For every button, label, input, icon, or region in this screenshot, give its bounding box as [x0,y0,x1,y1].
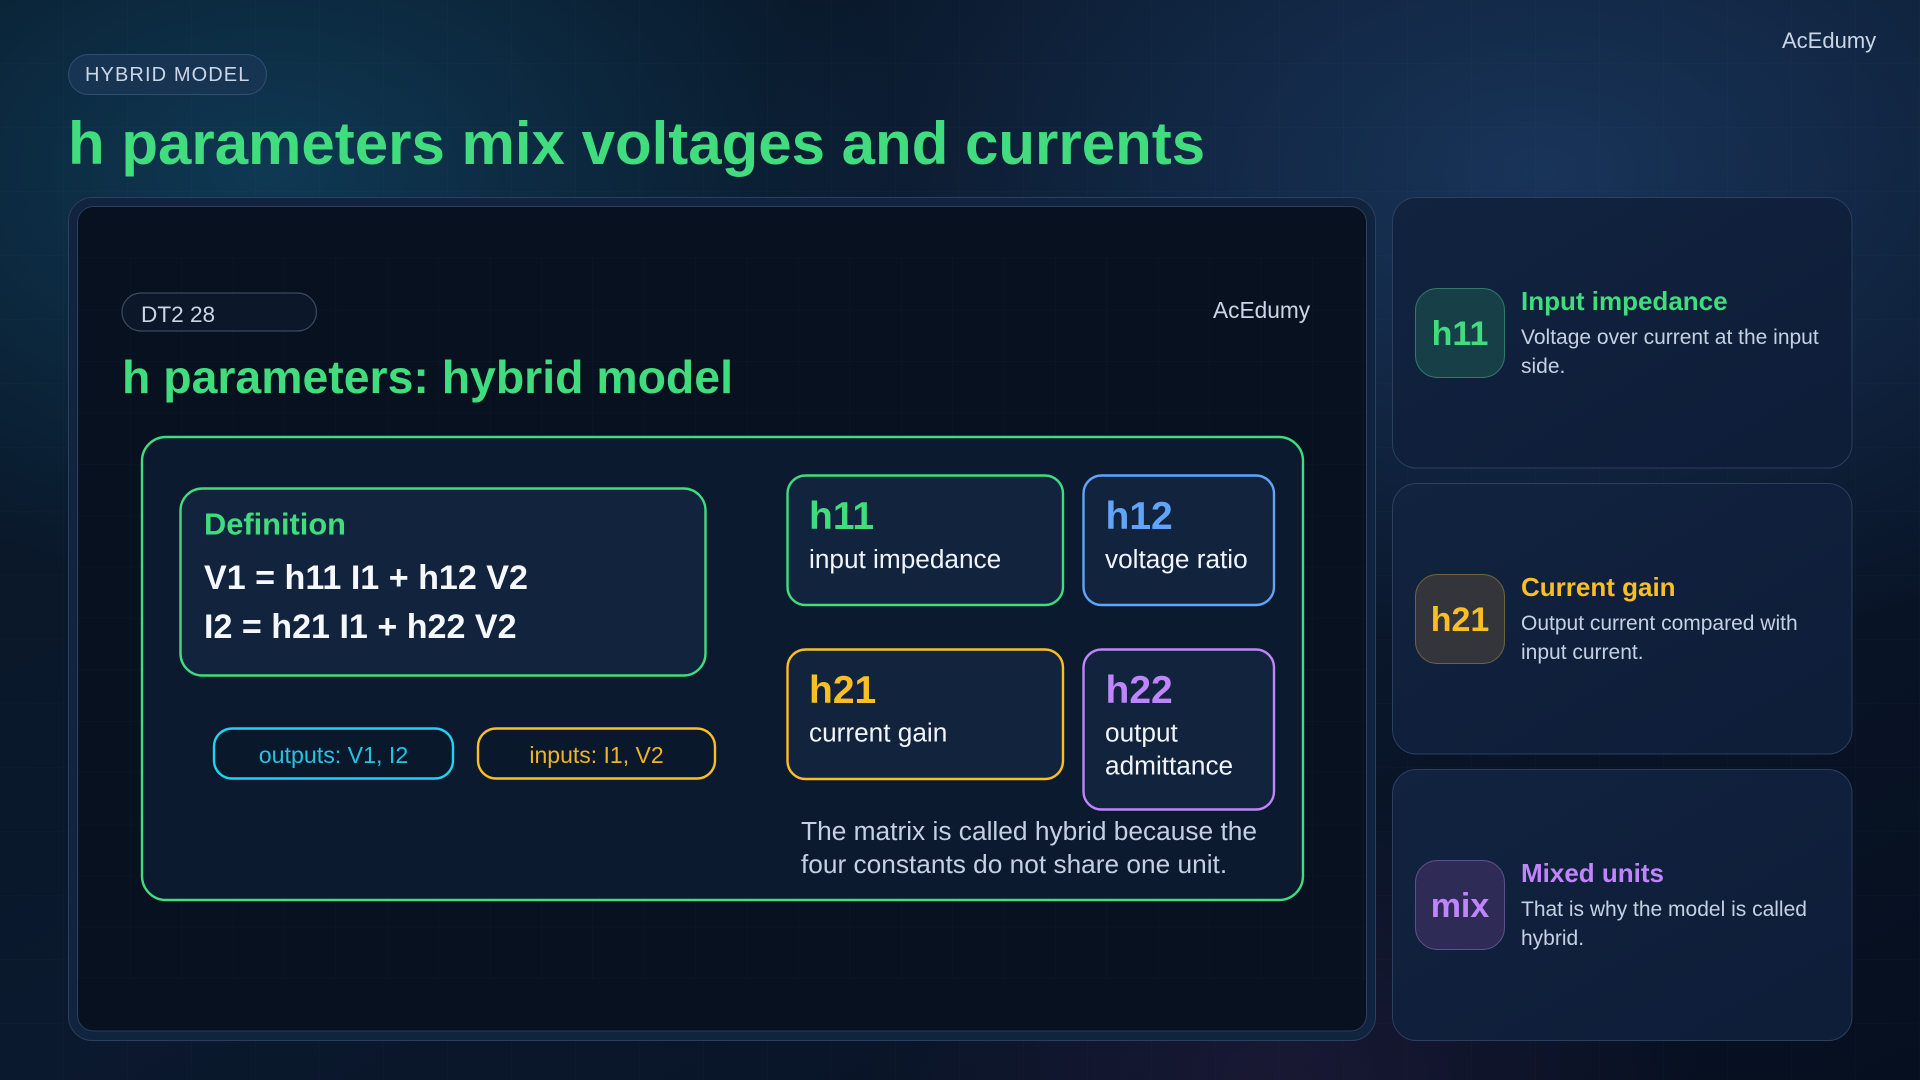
icon: mix [1416,860,1504,950]
text: mixed units: That is why the model is called [1521,898,1807,921]
note text [801,816,1257,879]
card: h22: admittance [1105,750,1233,780]
brand label top right: AcEdumy [1782,28,1876,53]
slide tag: DT2 28 [141,302,215,327]
card: h22: h22 [1106,669,1173,712]
note text: The matrix is called hybrid because the [801,816,1257,846]
main title: h parameters mix voltages and currents [68,110,1205,177]
text: current gain [1521,572,1798,664]
text: current gain: input current. [1521,641,1644,664]
section badge [68,54,266,94]
icon: h21: h21 [1431,601,1489,639]
card: h22: output [1105,718,1179,748]
definition box: V1 = h11 I1 + h12 V2 [204,559,528,597]
text: current gain: Current gain [1521,572,1676,602]
outputs pill [214,728,453,778]
outputs pill: outputs: V1, I2 [259,742,408,768]
panel: slide screen [78,206,1366,1031]
inputs pill: inputs: I1, V2 [529,742,664,768]
card: h22 [1084,650,1274,810]
card: h21 [788,650,1063,779]
card: h12 [1084,476,1274,605]
panel: mixed units card [1392,770,1852,1040]
text: input impedance: Voltage over current at the input [1521,326,1819,349]
card: h21: h21 [809,669,876,712]
inputs pill [478,728,715,778]
text: mixed units: hybrid. [1521,927,1584,950]
text: mixed units [1521,858,1807,950]
text: input impedance [1521,286,1819,378]
text: input impedance: side. [1521,355,1565,378]
slide tag [122,293,316,331]
slide heading: h parameters: hybrid model [122,351,733,403]
note text: four constants do not share one unit. [801,849,1227,879]
panel: current gain card [1392,484,1852,754]
definition box [180,488,706,676]
icon: h11: h11 [1432,315,1488,353]
text: current gain: Output current compared with [1521,612,1798,635]
slide brand label: AcEdumy [1213,297,1311,323]
card: h11: h11 [809,495,874,538]
panel: input impedance card [1392,198,1852,468]
section badge: HYBRID MODEL [85,64,250,86]
text: input impedance: Input impedance [1521,286,1728,316]
text: mixed units: Mixed units [1521,858,1664,888]
definition box: I2 = h21 I1 + h22 V2 [204,608,517,646]
card: h11 [788,476,1063,605]
card: h12: voltage ratio [1105,544,1248,574]
panel: main slide frame [68,198,1376,1040]
card: h12: h12 [1106,495,1173,538]
card: h11: input impedance [809,544,1001,574]
icon: h21 [1416,574,1504,664]
card: h21: current gain [809,718,947,748]
icon: h11 [1416,288,1504,378]
panel: diagram [142,437,1303,900]
definition box: Definition [204,506,346,542]
icon: mix: mix [1431,887,1489,925]
